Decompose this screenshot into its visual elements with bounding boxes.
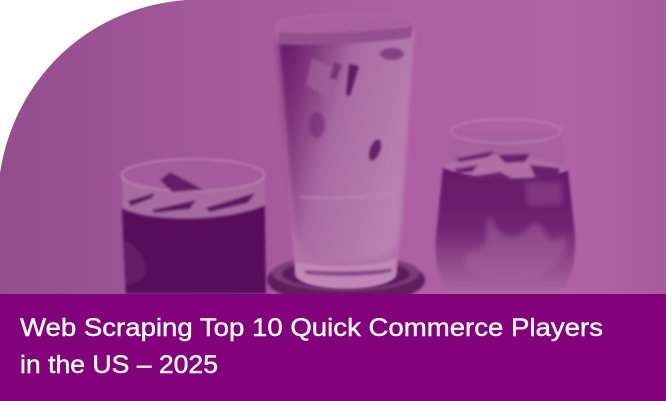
tall glass with iced milk drink <box>276 14 415 288</box>
title line 2: in the US – 2025 <box>20 351 218 379</box>
photo background <box>0 0 666 294</box>
title banner <box>0 294 666 401</box>
title line 1: Web Scraping Top 10 Quick Commerce Players <box>20 314 603 342</box>
right glass with swirled drink <box>436 119 575 294</box>
photo panel: three iced drinks on purple background <box>0 0 666 305</box>
coaster <box>266 260 426 294</box>
left glass with dark drink <box>122 159 266 294</box>
